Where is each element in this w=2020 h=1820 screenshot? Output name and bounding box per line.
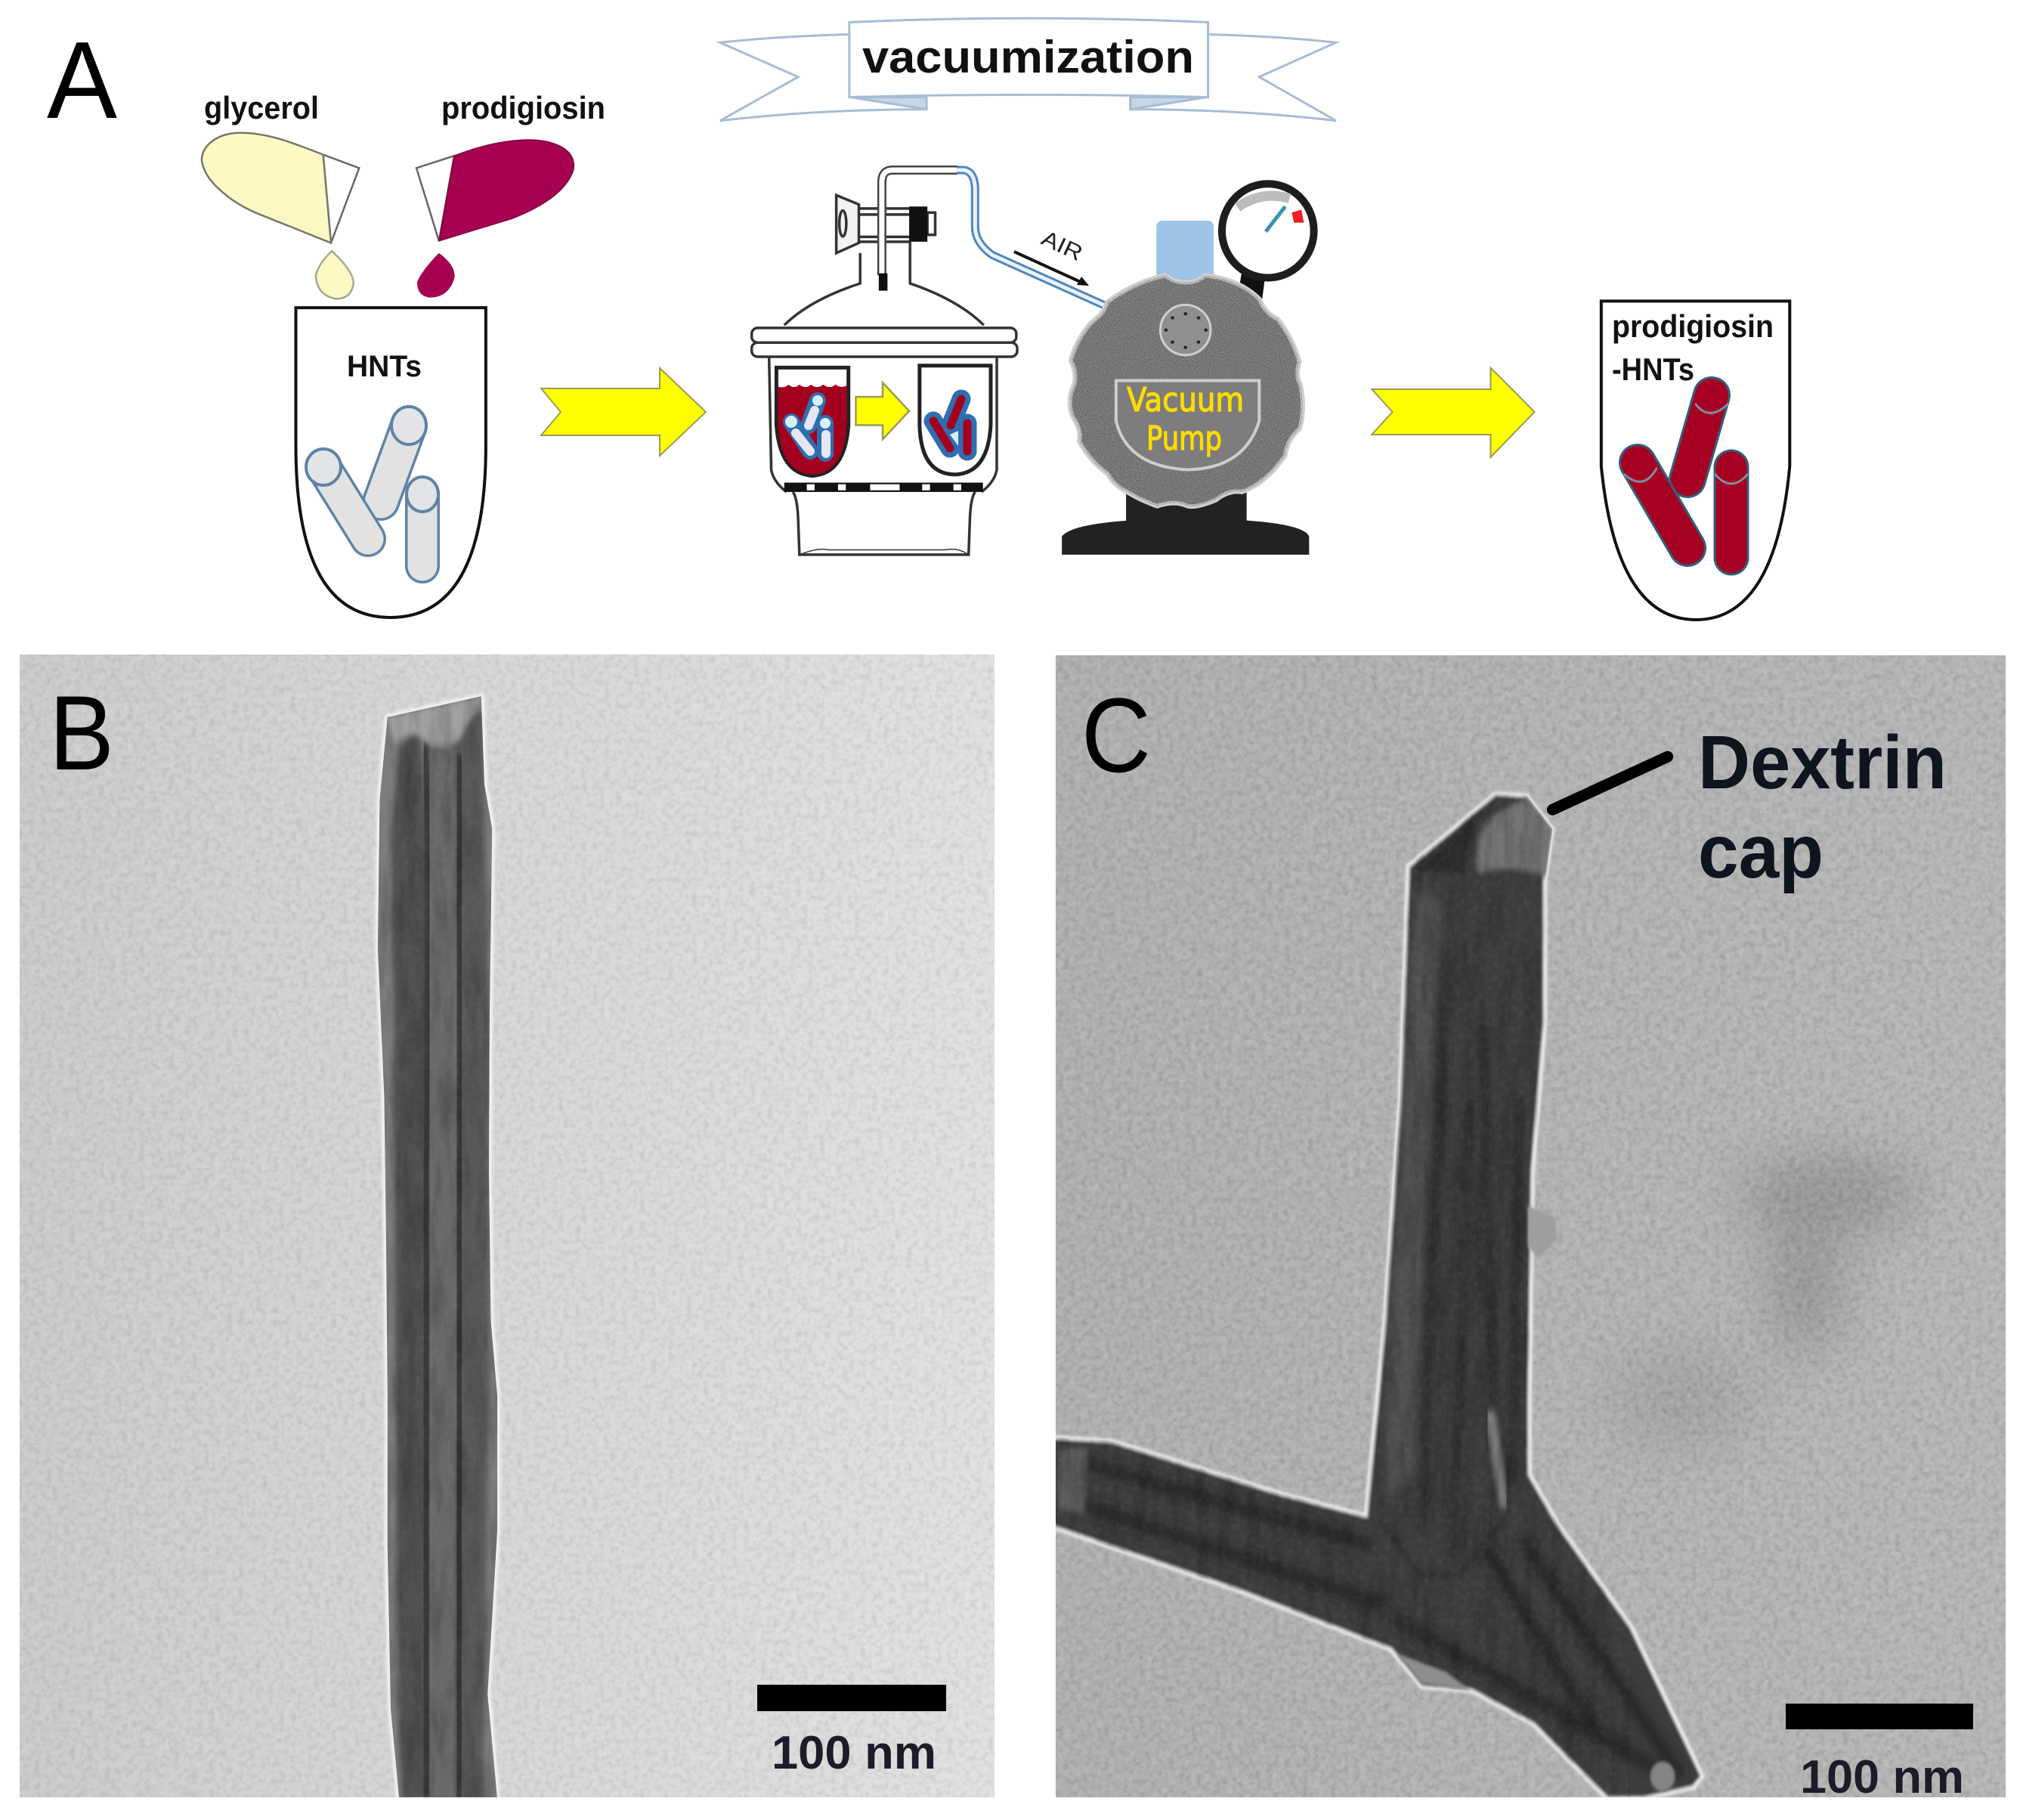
label: HNTs: HNTs (347, 350, 422, 383)
icon: pump blue cap (1156, 221, 1214, 281)
icon: loaded rods small (933, 399, 967, 451)
label: prodigiosin-HNTs: prodigiosin (1612, 308, 1774, 344)
icon: loaded rod upper (1687, 395, 1728, 479)
panel C: TEM image with dextrin cap (1050, 655, 2006, 1803)
icon: loaded rod left (1625, 463, 1687, 548)
label: cap: cap (1698, 809, 1824, 894)
panel A: vacuum loading schematic (47, 18, 1790, 620)
icon: prodigiosin drop (417, 253, 455, 298)
scale bar B (757, 1685, 946, 1711)
icon: pump port (1160, 305, 1211, 355)
branched nanotube (1050, 786, 1703, 1799)
scale bar C (1786, 1704, 1973, 1729)
icon: glycerol drop (316, 251, 354, 299)
icon: tube before vacuum (776, 367, 849, 475)
panel label C: C (1081, 676, 1151, 794)
arrow: to product (1372, 368, 1535, 457)
scale label C: 100 nm (1800, 1751, 1964, 1803)
icon: prodigiosin scoop (416, 140, 574, 241)
panel label B: B (49, 673, 114, 792)
label: Vacuum: Vacuum (1127, 381, 1244, 419)
icon: rod upper (381, 407, 426, 502)
nanotube (370, 680, 506, 1799)
panel B: TEM image of halloysite nanotube (20, 655, 995, 1799)
arrow: air flow (1014, 252, 1089, 286)
scale label B: 100 nm (772, 1727, 936, 1779)
icon: pump label plate (1116, 381, 1259, 469)
icon: pressure gauge (1222, 184, 1314, 299)
icon: HNTs container (295, 308, 486, 618)
arrow: inner step (855, 382, 909, 439)
icon: rod left (306, 449, 368, 539)
leader line (1552, 757, 1668, 809)
icon: vacuum pump (1062, 184, 1314, 555)
icon: rods in solution (785, 395, 831, 453)
icon: rod right (407, 477, 438, 566)
label: Pump: Pump (1146, 419, 1222, 458)
icon: pump body (1070, 275, 1303, 506)
arrow: to desiccator (541, 368, 706, 456)
label: Dextrin: Dextrin (1698, 720, 1947, 805)
label: AIR: AIR (1038, 226, 1086, 266)
panel label A: A (47, 19, 117, 141)
icon: glycerol scoop (202, 133, 359, 243)
icon: pump foot (1062, 492, 1309, 555)
label: -HNTs line: -HNTs (1612, 351, 1694, 387)
icon: prodigiosin-HNTs container (1601, 301, 1790, 620)
banner: vacuumization (720, 18, 1336, 121)
icon: desiccator (752, 170, 1106, 555)
label: glycerol: glycerol (204, 90, 319, 125)
dextrin cap (1476, 797, 1552, 878)
label: prodigiosin: prodigiosin (441, 90, 605, 125)
icon: loaded rod right (1715, 467, 1747, 558)
icon: air hose (879, 170, 1106, 305)
icon: tube after vacuum (920, 366, 991, 475)
label: vacuumization: vacuumization (862, 32, 1194, 82)
